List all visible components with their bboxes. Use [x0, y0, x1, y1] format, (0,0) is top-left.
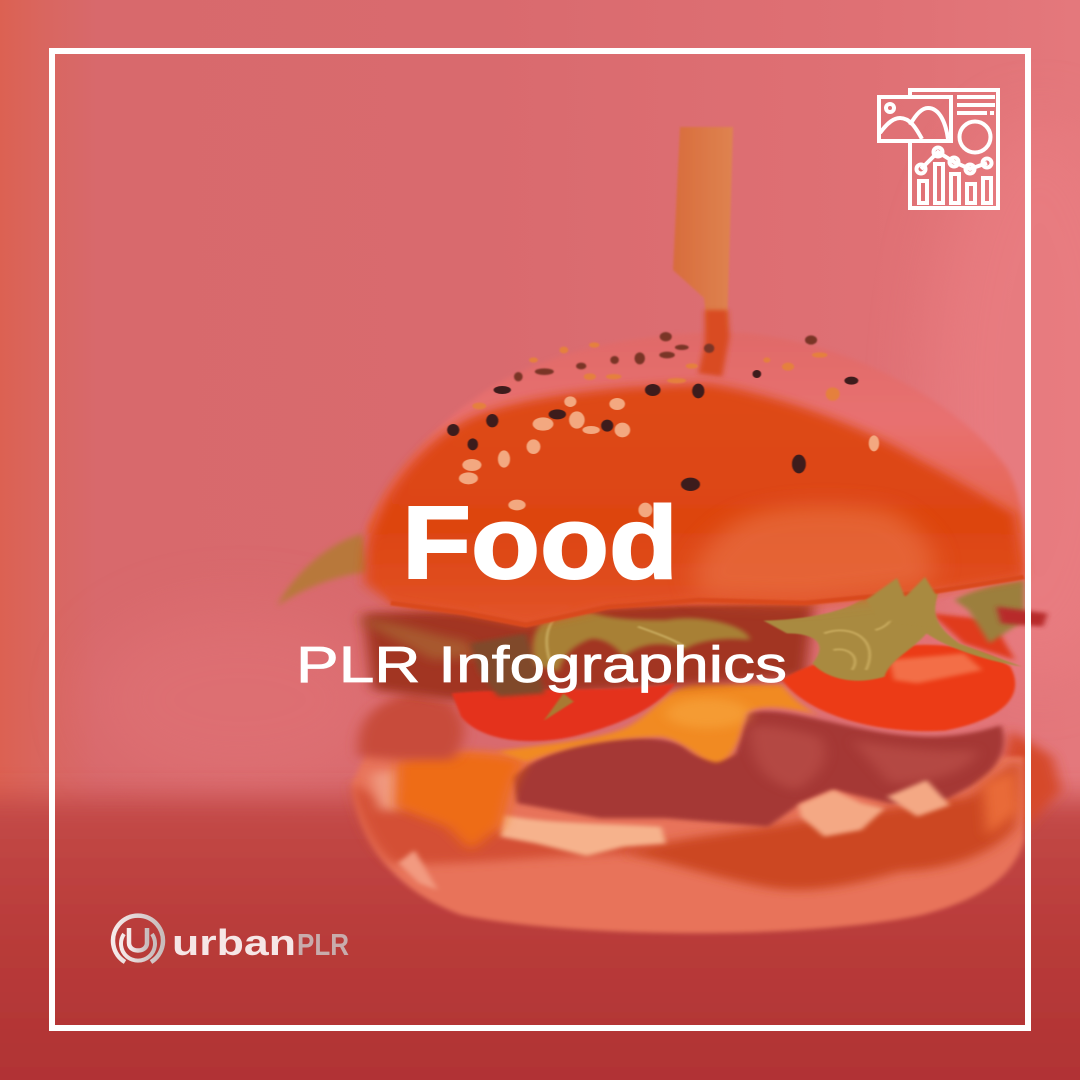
bun lip edge — [391, 577, 1024, 625]
melted cheese — [498, 683, 819, 763]
left fried layer — [358, 693, 464, 760]
dark gap under bun — [363, 593, 815, 700]
subtitle: PLR Infographics — [296, 636, 787, 693]
top bun — [364, 310, 1024, 625]
light sesame seeds — [459, 396, 879, 517]
saturated bun body — [364, 383, 1024, 625]
lettuce tip — [544, 693, 574, 721]
text lines — [957, 97, 995, 113]
left dark greens — [470, 633, 545, 697]
tomato pulp — [889, 653, 982, 683]
bun crumb highlight — [398, 850, 438, 890]
patty sheen — [750, 726, 978, 790]
pick stem — [698, 310, 730, 377]
mayo right — [799, 780, 950, 837]
far right red bit — [996, 607, 1048, 627]
burger lower layers — [352, 577, 1062, 933]
dark sesame seeds — [447, 370, 858, 491]
left cheese — [396, 752, 526, 850]
mayo centre — [501, 815, 666, 856]
pink dome — [367, 333, 1024, 625]
burger photo — [277, 127, 1062, 933]
picture frame — [879, 97, 951, 141]
logo mark — [113, 916, 163, 962]
cheese highlight — [666, 698, 750, 728]
right lettuce back — [954, 580, 1024, 643]
bun crust left — [352, 783, 666, 864]
logo word PLR: PLR — [297, 927, 349, 962]
document outline — [910, 90, 998, 208]
left outer lettuce leaf — [277, 534, 368, 606]
picture landscape — [880, 108, 948, 139]
tomato deep shade — [931, 613, 1015, 660]
icon: infographic document — [879, 90, 998, 208]
mayo left — [370, 770, 401, 810]
middle lettuce — [533, 606, 750, 672]
wooden pick — [673, 127, 733, 332]
bun crust stained middle — [624, 760, 1020, 890]
right lettuce tips over bun — [866, 577, 936, 625]
burger patty — [512, 711, 1004, 827]
lettuce curls — [547, 600, 895, 670]
circle chart — [960, 122, 990, 152]
bun light patch — [695, 505, 934, 600]
line chart — [916, 148, 992, 174]
orange sesame seeds — [472, 342, 840, 409]
tomato left — [452, 683, 675, 741]
logo word urban: urban — [172, 922, 296, 963]
bottom bun — [352, 750, 1024, 933]
picture sun — [886, 104, 894, 112]
right orange sauce — [982, 770, 1020, 837]
right lettuce leaf — [764, 577, 1022, 681]
title: Food — [402, 485, 678, 600]
right bun edge — [992, 730, 1062, 830]
left lettuce — [359, 620, 480, 660]
logo: urbanPLR — [113, 916, 349, 963]
tomato right — [782, 645, 1015, 731]
faint top seeds — [514, 332, 817, 381]
bar chart — [919, 164, 991, 203]
